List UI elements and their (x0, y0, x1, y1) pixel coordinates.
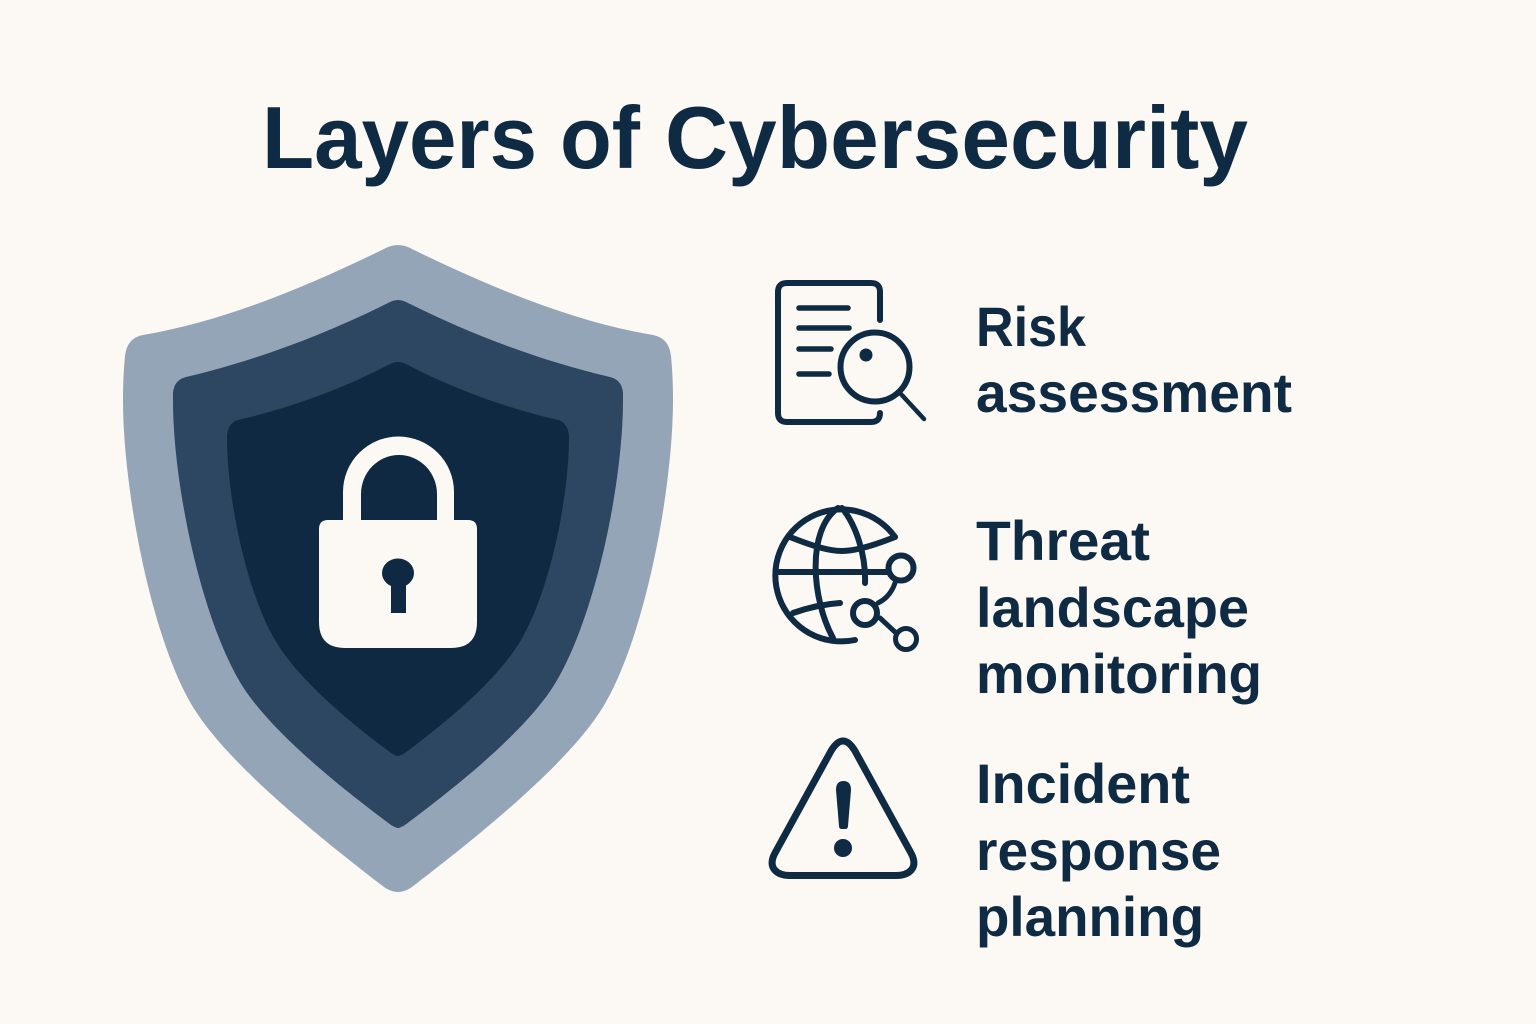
text: threat landscape monitoring: monitoring (976, 642, 1262, 705)
title: Layers (262, 88, 537, 187)
shield outer layer (123, 245, 673, 892)
text: threat landscape monitoring: Threat (976, 509, 1150, 572)
shield middle layer (173, 300, 623, 828)
icon: globe with network nodes (775, 508, 916, 650)
title: of (560, 88, 641, 187)
icon: document with magnifier (778, 283, 924, 422)
shield with padlock (123, 245, 673, 892)
text: threat landscape monitoring: landscape (976, 576, 1249, 639)
text: incident response planning: planning (976, 885, 1204, 948)
text: incident response planning: response (976, 819, 1221, 882)
text: incident response planning: Incident (976, 752, 1190, 815)
text: risk assessment: assessment (976, 361, 1292, 424)
title: Cybersecurity (665, 88, 1248, 187)
shield inner layer (227, 362, 569, 756)
icon: padlock (319, 437, 477, 648)
text: risk assessment: Risk (976, 295, 1087, 358)
icon: warning triangle (772, 741, 914, 876)
